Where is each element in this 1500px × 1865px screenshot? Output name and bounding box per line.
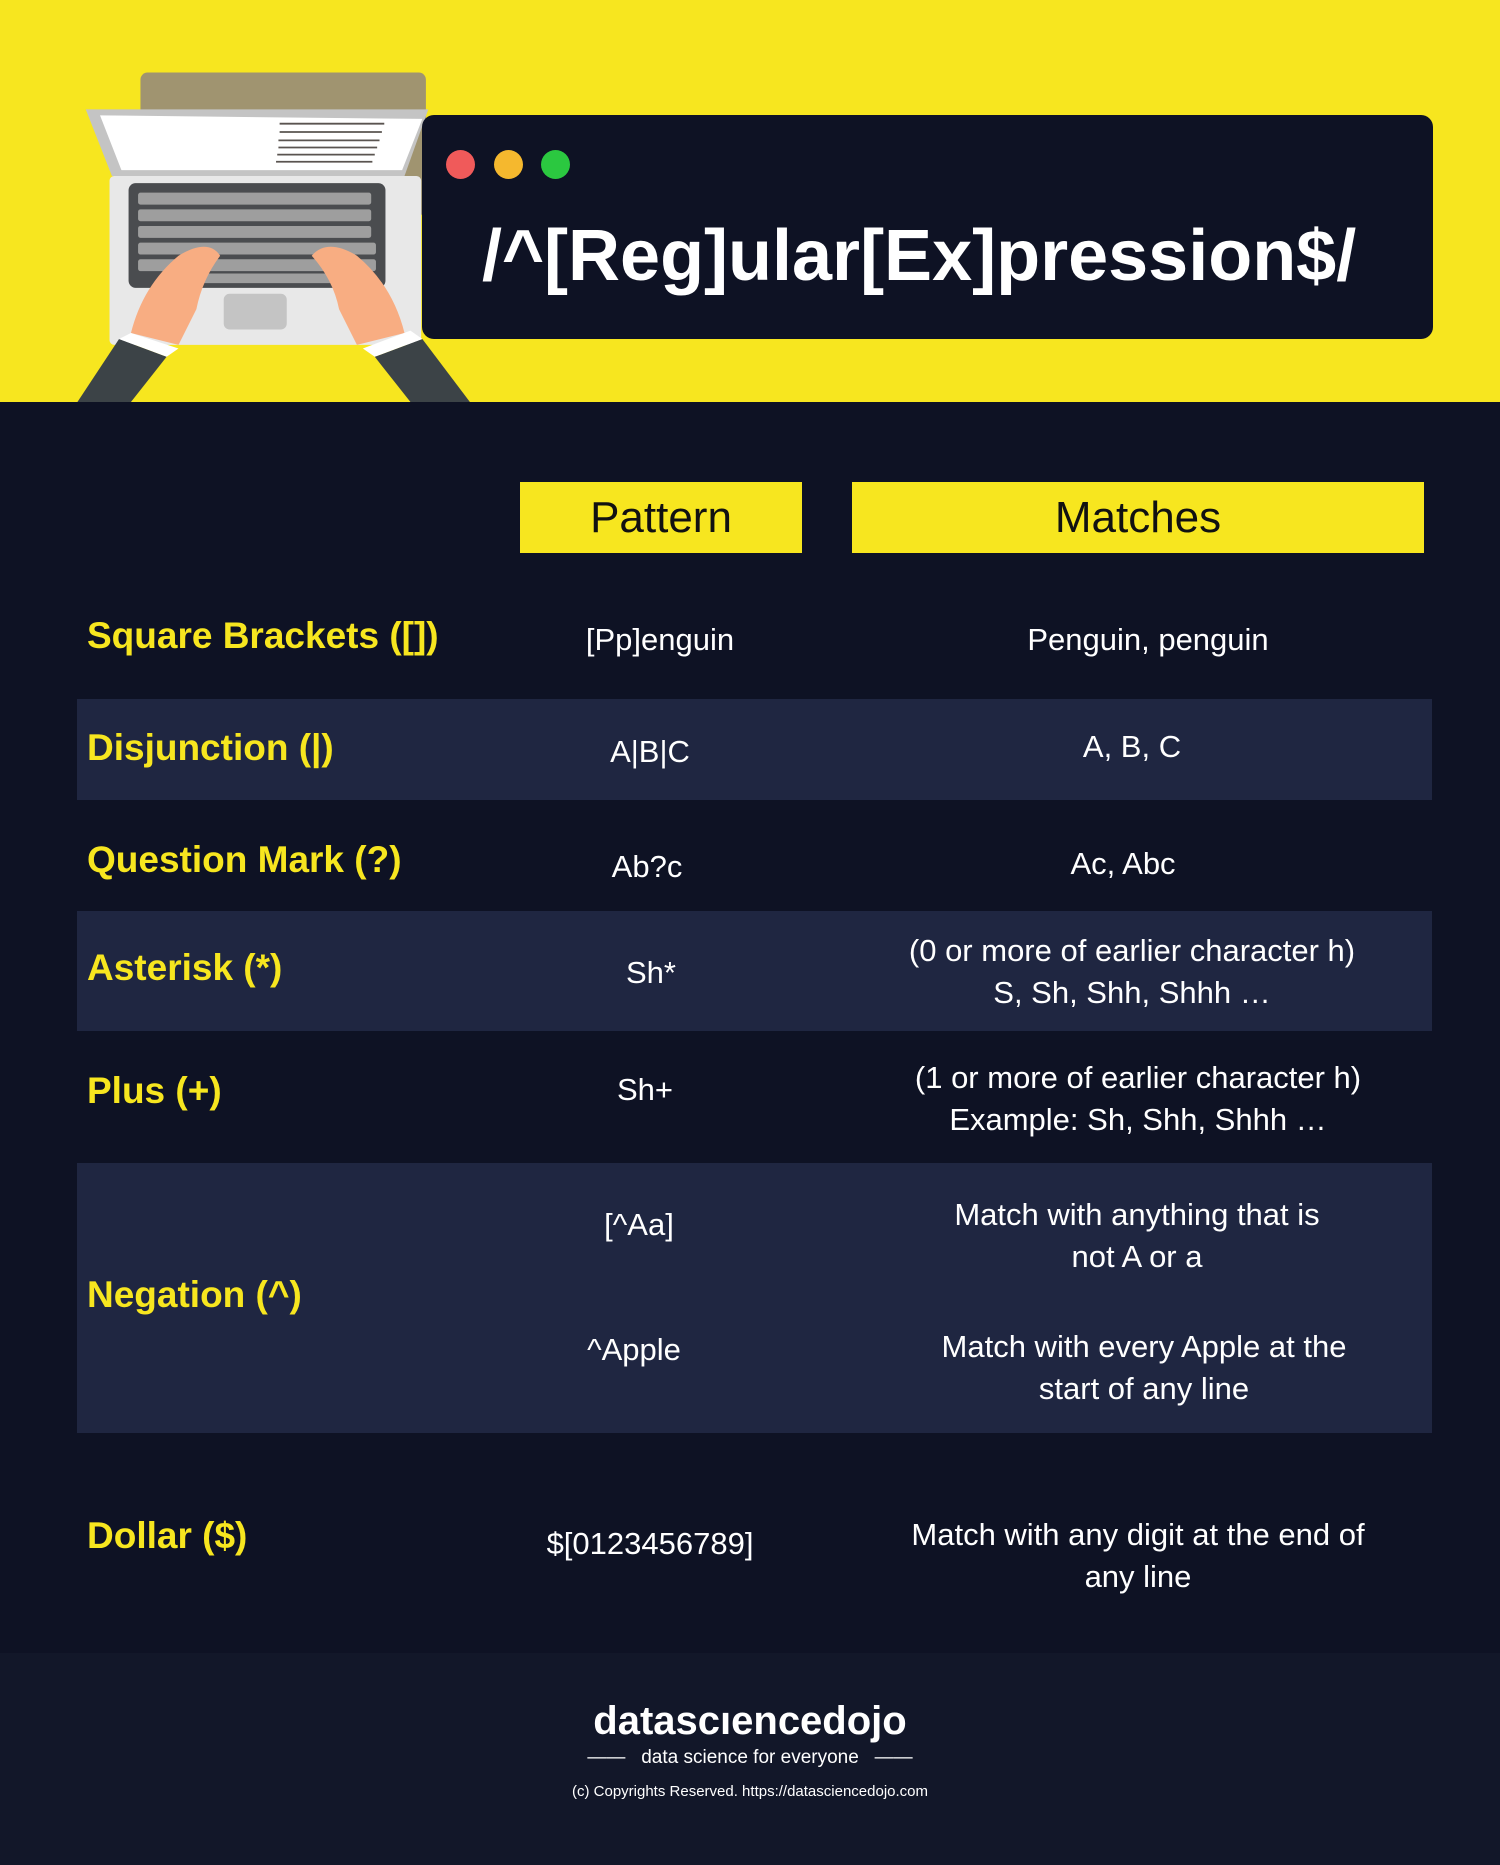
column header: Pattern: Pattern bbox=[590, 493, 732, 542]
row: asterisk bbox=[87, 933, 1355, 1010]
row: question mark: Ac, Abc bbox=[1070, 846, 1176, 881]
logo: datascıencedojo bbox=[593, 1699, 907, 1743]
terminal title box bbox=[422, 115, 1433, 339]
column header: Matches bbox=[852, 482, 1424, 553]
row: plus: Example: Sh, Shh, Shhh … bbox=[949, 1102, 1327, 1137]
column header: Matches: Matches bbox=[1055, 493, 1221, 542]
row: dollar: any line bbox=[1085, 1559, 1191, 1594]
title: /^[Reg]ular[Ex]pression$/ bbox=[482, 216, 1356, 296]
row: square brackets: Square Brackets ([]) bbox=[87, 615, 439, 656]
row: negation: start of any line bbox=[1039, 1371, 1249, 1406]
row: negation: Match with anything that is bbox=[954, 1197, 1320, 1232]
row: plus bbox=[87, 1060, 1361, 1137]
row: dollar bbox=[87, 1515, 1365, 1594]
row: disjunction: Disjunction (|) bbox=[87, 727, 334, 768]
row: negation: not A or a bbox=[1071, 1239, 1202, 1274]
row: asterisk: (0 or more of earlier character h) bbox=[909, 933, 1355, 968]
row: dollar: $[0123456789] bbox=[547, 1526, 753, 1561]
window dots bbox=[446, 150, 570, 179]
row: dollar: Dollar ($) bbox=[87, 1515, 247, 1556]
footer bbox=[0, 1653, 1500, 1865]
row: negation: [^Aa] bbox=[604, 1207, 674, 1242]
row: square brackets bbox=[87, 615, 1269, 657]
row: question mark bbox=[87, 839, 1176, 884]
row: disjunction: A, B, C bbox=[1083, 729, 1181, 764]
row: asterisk: Sh* bbox=[626, 955, 676, 990]
row: dollar: Match with any digit at the end of bbox=[911, 1517, 1365, 1552]
illustration: laptop with typing hands bbox=[78, 72, 470, 402]
row: asterisk: Asterisk (*) bbox=[87, 947, 282, 988]
copyright: (c) Copyrights Reserved. https://datasciencedojo.com bbox=[572, 1783, 928, 1800]
row: question mark: Question Mark (?) bbox=[87, 839, 402, 880]
tagline: —— data science for everyone —— bbox=[587, 1747, 913, 1768]
row: plus: (1 or more of earlier character h) bbox=[915, 1060, 1361, 1095]
row: negation: Negation (^) bbox=[87, 1274, 302, 1315]
row: negation: Match with every Apple at the bbox=[942, 1329, 1346, 1364]
row: square brackets: Penguin, penguin bbox=[1027, 622, 1269, 657]
row: asterisk: S, Sh, Shh, Shhh … bbox=[993, 975, 1271, 1010]
row: negation bbox=[87, 1197, 1346, 1406]
row: negation: ^Apple bbox=[587, 1332, 681, 1367]
row: disjunction bbox=[87, 727, 1181, 769]
row bands bbox=[77, 699, 1432, 800]
row: plus: Plus (+) bbox=[87, 1070, 222, 1111]
row: disjunction: A|B|C bbox=[610, 734, 690, 769]
row: question mark: Ab?c bbox=[612, 849, 682, 884]
row: square brackets: [Pp]enguin bbox=[586, 622, 734, 657]
row: plus: Sh+ bbox=[617, 1072, 673, 1107]
column header: Pattern bbox=[520, 482, 802, 553]
header banner bbox=[0, 0, 1500, 402]
